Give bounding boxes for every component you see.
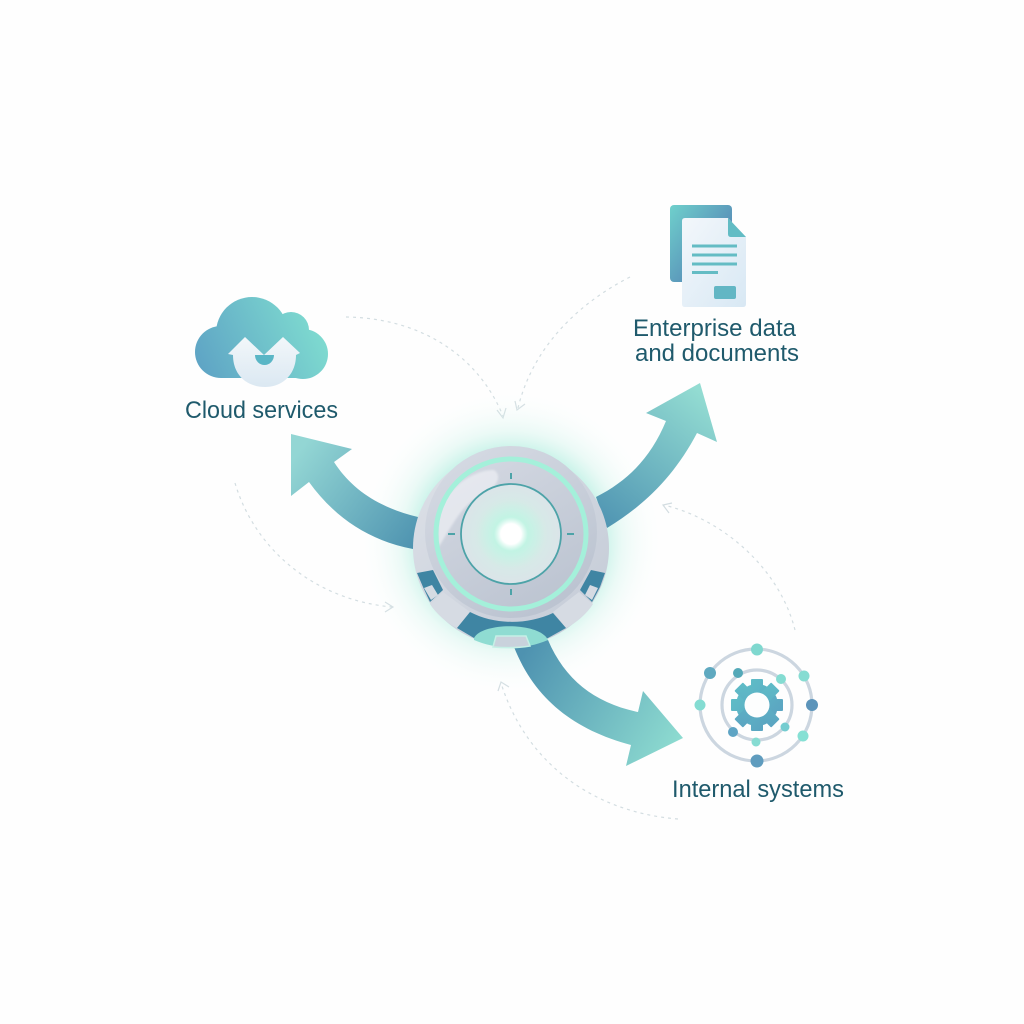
right clamp inset [585, 585, 598, 600]
icon: documents [670, 205, 746, 307]
dashed return arrow: cloud to hub [346, 317, 506, 418]
sphere face [425, 446, 597, 618]
right clamp [580, 570, 605, 602]
lower left panel [430, 592, 470, 628]
core light [477, 500, 545, 568]
label: cloud services: Cloud services [185, 397, 338, 424]
circular arrows [228, 337, 300, 387]
gear hole [744, 692, 770, 718]
page fold [728, 218, 746, 237]
left clamp [417, 570, 443, 602]
label: internal systems: Internal systems [672, 776, 844, 803]
text lines [692, 246, 737, 272]
arrow: to cloud services [291, 434, 418, 549]
lower right panel [553, 592, 593, 628]
left clamp inset [424, 585, 438, 600]
mint ring [436, 459, 586, 609]
inner nodes [728, 668, 790, 746]
central hub sphere [413, 446, 609, 648]
cloud shape [195, 297, 328, 379]
bottom pad inset [493, 636, 530, 648]
inner core [461, 484, 561, 584]
outer nodes [694, 644, 818, 768]
orbits [700, 649, 812, 761]
dashed return arrow: systems to hub [663, 503, 795, 630]
bottom pad [474, 626, 548, 648]
label: enterprise data and documents: Enterprise data [633, 315, 797, 342]
front sheet [682, 218, 746, 307]
back sheet [670, 205, 732, 282]
dashed return arrow: documents to hub [515, 277, 630, 410]
dashed return arrow: bottom to hub [498, 682, 678, 819]
highlight [438, 470, 498, 548]
label: enterprise data and documents: and documents [635, 340, 799, 367]
teal band [457, 612, 566, 644]
dashed return arrow: left to hub [235, 483, 393, 612]
arrow: to internal systems [514, 640, 683, 766]
tick marks [448, 473, 574, 595]
label: enterprise data and documents [633, 315, 799, 367]
stamp [714, 286, 736, 299]
icon: cloud with arrows [195, 297, 328, 387]
arrow: to enterprise data [596, 383, 717, 528]
inner cutout [255, 355, 274, 365]
hub glow [356, 387, 666, 697]
icon: gear with orbits [694, 644, 818, 768]
gear [731, 679, 783, 731]
sphere body [413, 450, 609, 646]
